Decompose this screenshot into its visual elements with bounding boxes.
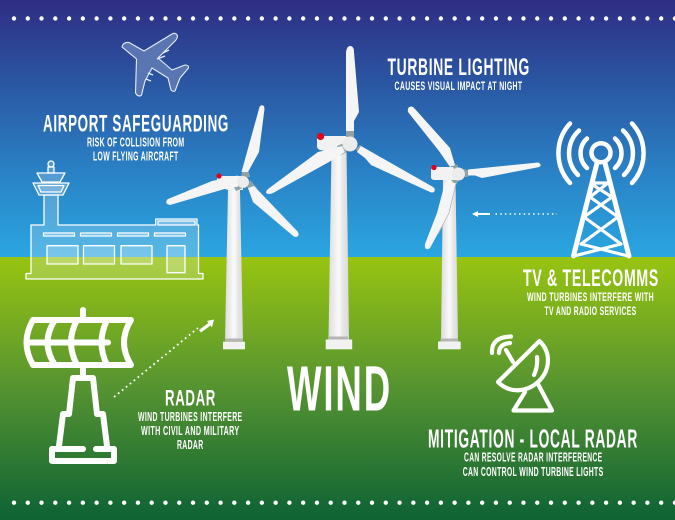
top dotted border	[14, 16, 675, 21]
text: turbine lighting line: CAUSES VISUAL IMPACT AT NIGHT	[394, 79, 523, 93]
turbine: right	[408, 106, 541, 349]
heading: wind: WIND	[287, 353, 392, 425]
text: radar line 2: WITH CIVIL AND MILITARY	[141, 423, 240, 438]
text: airport line 2: LOW FLYING AIRCRAFT	[93, 148, 178, 164]
heading: radar: RADAR	[165, 386, 216, 411]
text: airport line 1: RISK OF COLLISION FROM	[87, 134, 184, 150]
icon: TV telecoms mast	[558, 124, 644, 256]
arrow: mast to turbine	[472, 211, 557, 217]
arrow: radar to turbine	[114, 320, 214, 397]
icon: airplane	[122, 33, 189, 96]
turbine: left	[166, 105, 299, 349]
bottom dotted border	[14, 501, 675, 505]
turbine: center	[266, 46, 435, 349]
icon: radar tower	[26, 310, 131, 461]
sky background	[0, 0, 675, 257]
text: radar line 3: RADAR	[177, 437, 204, 452]
heading: airport safeguarding: AIRPORT SAFEGUARDING	[43, 111, 229, 138]
icon: local radar dish	[492, 336, 552, 410]
heading: turbine lighting: TURBINE LIGHTING	[388, 54, 530, 81]
icon: airport terminal and control tower	[26, 161, 203, 279]
text: radar line 1: WIND TURBINES INTERFERE	[138, 409, 242, 424]
grass background	[0, 257, 675, 520]
